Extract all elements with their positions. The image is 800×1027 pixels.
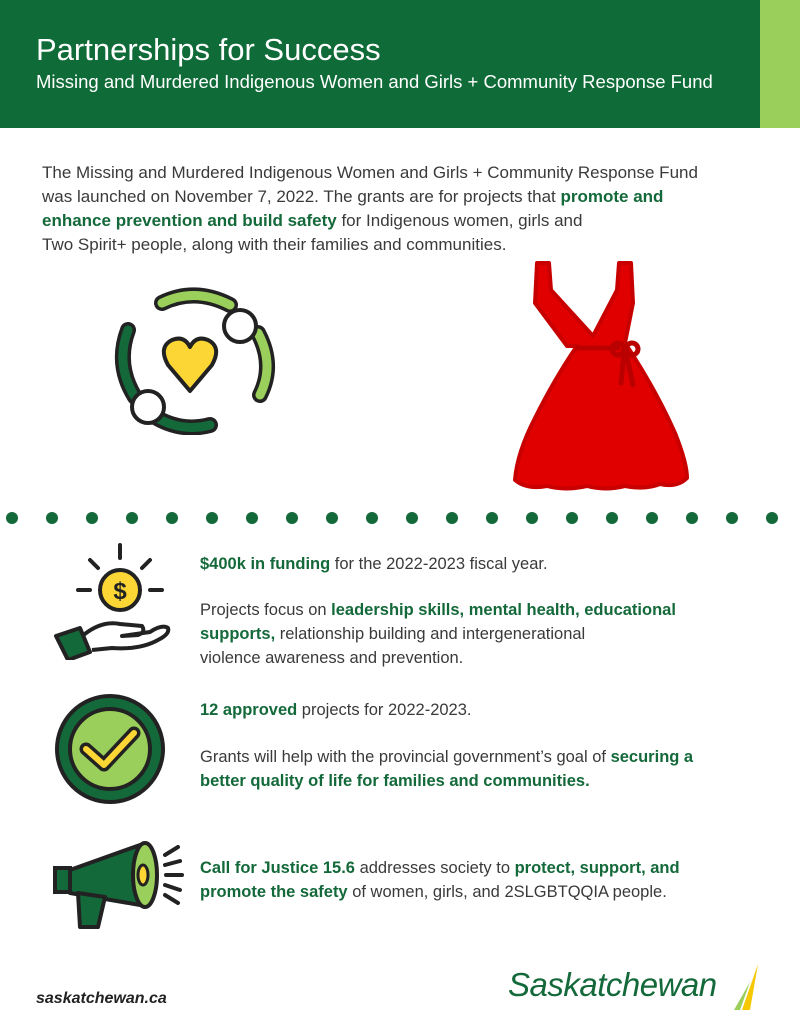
- intro text: Two Spirit+ people, along with their families and communities.: [42, 235, 506, 254]
- icon: heart circle: [114, 287, 276, 435]
- intro text: enhance prevention and build safety for Indigenous women, girls and: [42, 211, 582, 230]
- approved projects text block: 12 approved projects for 2022-2023. Grants will help with the provincial government’s goal of securing a: [200, 701, 693, 766]
- call for justice text block: promote the safety of women, girls, and 2SLGBTQQIA people.: [200, 883, 667, 901]
- icon: red dress: [513, 261, 689, 490]
- approved projects text block: better quality of life for families and communities.: [200, 772, 590, 790]
- dotted divider: [6, 512, 778, 524]
- logo: Saskatchewan: Saskatchewan: [508, 966, 717, 1003]
- intro text: The Missing and Murdered Indigenous Women and Girls + Community Response Fund: [42, 163, 698, 182]
- intro text: was launched on November 7, 2022. The grants are for projects that promote and: [42, 187, 663, 206]
- funding text block: [200, 555, 676, 667]
- icon: money hand: $: [113, 578, 127, 605]
- call for justice text block: [200, 859, 680, 901]
- icon: megaphone: [53, 841, 184, 929]
- icon: checkmark: [55, 694, 165, 804]
- logo: Saskatchewan: [508, 964, 758, 1010]
- icon: money hand: [54, 543, 170, 660]
- intro text: [42, 163, 698, 254]
- accent strip: [760, 0, 800, 128]
- funding text block: supports, relationship building and intergenerational: [200, 625, 585, 643]
- header banner: [0, 0, 800, 128]
- subtitle: Missing and Murdered Indigenous Women and Girls + Community Response Fund: [36, 71, 713, 92]
- funding text block: $400k in funding for the 2022-2023 fiscal year. Projects focus on leadership skills, mental health, educational: [200, 555, 676, 619]
- footer url: saskatchewan.ca: [36, 990, 167, 1007]
- title: Partnerships for Success: [36, 32, 381, 67]
- funding text block: violence awareness and prevention.: [200, 649, 463, 667]
- call for justice text block: Call for Justice 15.6 addresses society to protect, support, and: [200, 859, 680, 877]
